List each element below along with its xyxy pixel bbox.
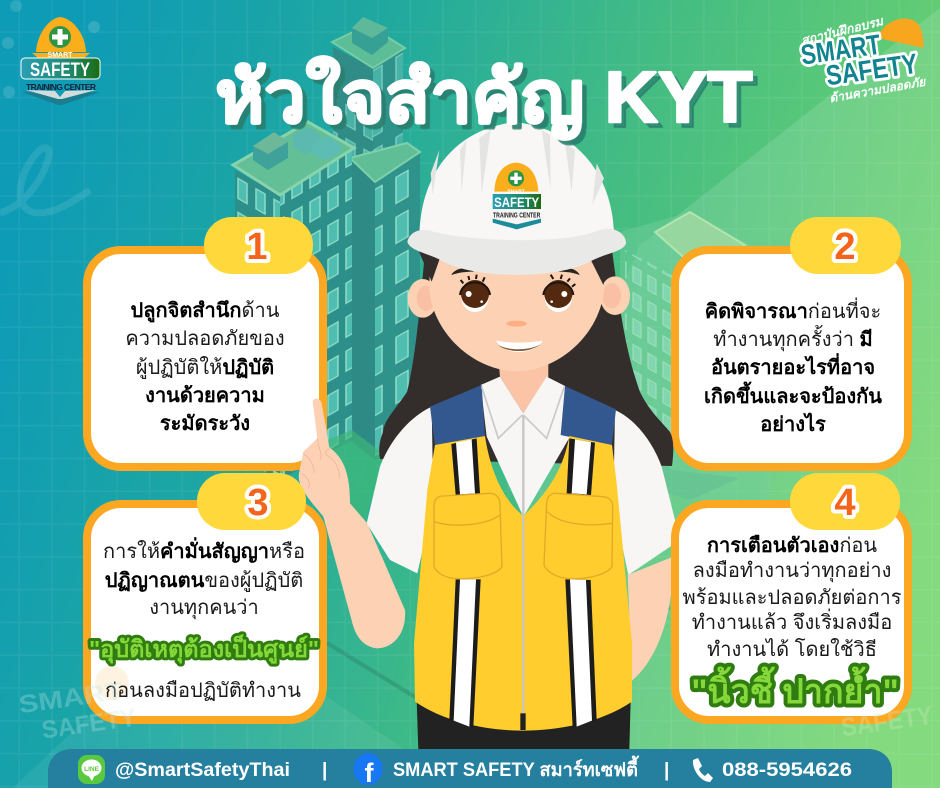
hair back <box>379 250 673 466</box>
blue shoulder right <box>561 386 616 446</box>
logo: Smart Safety Training Center: SAFETY <box>30 60 90 81</box>
blue shoulder left <box>430 385 485 446</box>
panel: card 2 text <box>704 297 882 436</box>
icon: LINE <box>78 755 105 784</box>
pockets <box>434 493 613 579</box>
card 1 frame <box>87 250 323 467</box>
panel: card 4: พร้อมและปลอดภัยต่อการ <box>683 587 902 609</box>
eyes <box>461 283 489 312</box>
right arm <box>628 557 673 681</box>
badge 3 <box>197 473 306 530</box>
panel: card 4: ทำงานได้ โดยใช้วิธี <box>707 638 877 661</box>
phone number: 088-5954626 <box>722 760 852 781</box>
panel: card 2 text: อันตรายอะไรที่อาจ <box>711 352 875 379</box>
panel: card 4: "นิ้วชี้ ปากย้ำ" <box>691 666 899 711</box>
tower upper section <box>333 47 373 170</box>
logo: Smart Safety institute: สถาบันฝึกอบรม <box>800 14 886 48</box>
logo: Smart Safety Training Center <box>21 17 100 105</box>
logo: Smart Safety Training Center: TRAINING CENTER <box>26 82 96 92</box>
right sleeve <box>613 410 680 575</box>
separator: | <box>322 760 327 781</box>
badge 4 <box>790 473 900 530</box>
logo: Smart Safety institute: ด้านความปลอดภัย <box>828 75 927 105</box>
watermark logos <box>17 677 934 745</box>
icon: LINE: LINE <box>84 766 100 773</box>
nose <box>506 321 527 327</box>
watermark logos: SMART <box>17 677 125 719</box>
mouth <box>496 341 543 352</box>
footer bar <box>48 749 892 788</box>
helmet logo: SMART <box>507 188 525 194</box>
orange helmet icon <box>880 19 923 48</box>
facebook name: SMART SAFETY สมาร์ทเซฟตี้ <box>393 755 640 781</box>
fringe <box>418 250 442 282</box>
panel: card 1 text: ความปลอดภัยของ <box>125 328 285 350</box>
background buildings <box>233 17 770 520</box>
panel: card 4 <box>675 504 908 720</box>
ears <box>408 279 438 318</box>
panel: card 2 text: เกิดขึ้นและจะป้องกัน <box>704 381 882 408</box>
eyebrows <box>452 268 474 275</box>
separator: | <box>664 760 669 781</box>
shirt front <box>481 377 570 517</box>
logo: Smart Safety institute: SAFETY <box>824 48 920 91</box>
vest stripes <box>451 438 480 495</box>
panel: card 3: งานทุกคนว่า <box>149 597 259 620</box>
icon: Facebook: f <box>364 758 374 788</box>
title: หัวใจสำคัญ KYT <box>220 60 758 145</box>
helmet logo: SAFETY <box>494 195 539 210</box>
panel: card 1 text: ผู้ปฏิบัติให้ปฏิบัติ <box>136 356 274 380</box>
panel: card 4: ทำงานแล้ว จึงเริ่มลงมือ <box>692 608 892 634</box>
panel: card 3 <box>87 504 323 720</box>
vest <box>414 436 632 731</box>
building: front block <box>233 122 354 480</box>
badge 2 <box>790 217 901 274</box>
character: woman in safety helmet and vest <box>299 122 680 750</box>
pants <box>417 700 631 750</box>
panel: card 1 text: ระมัดระวัง <box>160 413 250 435</box>
panel: card 4: การเตือนตัวเองก่อน <box>707 534 877 557</box>
panel: card 1 text: ปลูกจิตสำนึกด้าน <box>131 300 280 324</box>
helmet <box>407 122 626 275</box>
logo: Smart Safety Training Center: SMART <box>48 52 73 59</box>
building: right pale block <box>620 212 770 510</box>
left sleeve <box>367 407 433 573</box>
panel: card 3: ปฏิญาณตนของผู้ปฏิบัติ <box>105 570 303 593</box>
panel: card 1 text: งานด้วยความ <box>145 384 265 407</box>
title: หัวใจสำคัญ KYT <box>216 55 753 140</box>
collar <box>482 387 564 438</box>
panel: card 2 text: อย่างไร <box>760 412 826 436</box>
helmet logo <box>493 163 541 229</box>
panel: card 3: "อุบัติเหตุต้องเป็นศูนย์" <box>89 634 319 664</box>
badge 2: 2 <box>834 226 856 268</box>
icon: Facebook <box>354 753 382 788</box>
line handle: @SmartSafetyThai <box>115 760 290 781</box>
logo: Smart Safety institute: SMART <box>799 29 882 71</box>
panel: card 4: ลงมือทำงานว่าทุกอย่าง <box>693 560 891 583</box>
panel: card 3: ก่อนลงมือปฏิบัติทำงาน <box>105 680 301 702</box>
badge 4: 4 <box>834 482 856 524</box>
badge 1: 1 <box>246 226 268 268</box>
badge 1 <box>204 217 313 274</box>
logo: Smart Safety institute <box>799 14 927 105</box>
green ground patch <box>327 430 385 520</box>
panel: card 1 text <box>125 300 285 435</box>
raised arm and pointing hand <box>299 399 405 648</box>
zipper <box>520 415 527 713</box>
tower lower section <box>350 160 375 460</box>
face <box>429 257 604 371</box>
panel: card 2 text: ทำงานทุกครั้งว่า มี <box>713 325 873 352</box>
neck <box>498 357 548 413</box>
panel: card 2 text: คิดพิจารณาก่อนที่จะ <box>705 297 881 323</box>
panel: card 3: การให้คำมั่นสัญญาหรือ <box>103 536 305 563</box>
icon: phone <box>693 758 713 782</box>
card 2 frame <box>675 250 908 467</box>
badge 3: 3 <box>247 482 269 524</box>
watermark logos: SAFETY <box>40 704 138 745</box>
helmet logo: TRAINING CENTER <box>493 212 540 219</box>
building: tower <box>332 17 420 460</box>
